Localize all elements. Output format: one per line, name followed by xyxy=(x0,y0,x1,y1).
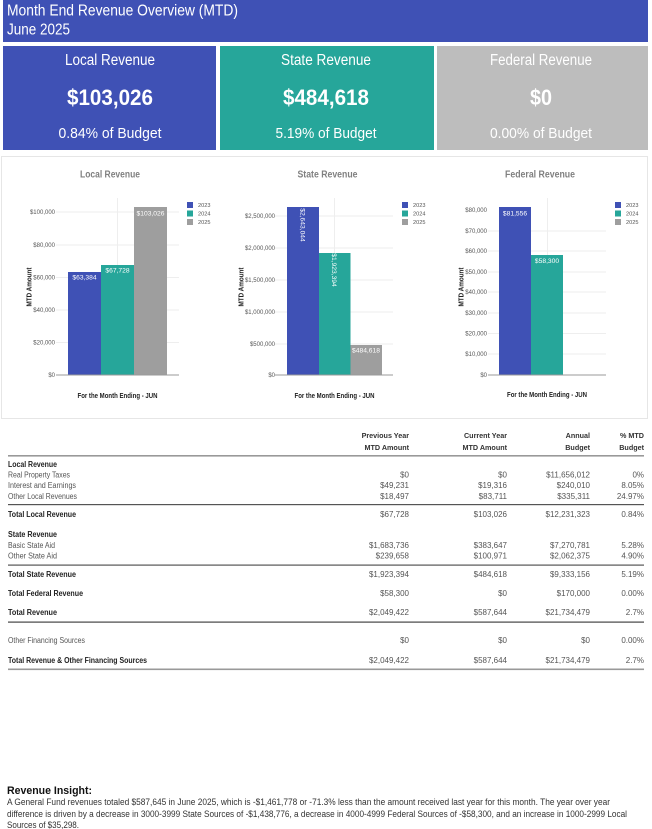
chart: state revenue: $0 xyxy=(268,373,276,379)
section: local revenue: $49,231 xyxy=(380,481,410,490)
row: total federal revenue xyxy=(8,589,644,598)
row: total revenue: $2,049,422 xyxy=(369,608,410,617)
chart: state revenue: 2024 xyxy=(413,212,425,218)
chart: federal revenue: $60,000 xyxy=(465,249,488,255)
chart: state revenue: MTD Amount xyxy=(236,267,246,306)
panel: charts container xyxy=(2,156,648,418)
chart: state revenue: $2,643,044 xyxy=(299,208,306,242)
row: other financing sources: Other Financing Sources xyxy=(8,636,85,645)
table header: MTD Amount xyxy=(463,443,508,452)
chart: federal revenue: $80,000 xyxy=(465,208,488,214)
section: local revenue: $0 xyxy=(498,470,508,480)
panel: state revenue KPI card: 5.19% of Budget xyxy=(276,125,377,142)
chart: federal revenue: $30,000 xyxy=(465,311,488,317)
chart: local revenue: 2023 xyxy=(198,203,210,209)
table header: % MTD xyxy=(620,431,644,440)
row: other financing sources: $0 xyxy=(498,636,508,645)
panel: federal revenue KPI card: Federal Revenue xyxy=(490,52,592,69)
chart: state revenue: $2,000,000 xyxy=(245,246,276,252)
section: state revenue: State Revenue xyxy=(8,530,57,539)
table header: Annual xyxy=(566,431,590,440)
chart: local revenue: Local Revenue xyxy=(80,170,140,180)
chart: federal revenue: $10,000 xyxy=(465,352,488,358)
chart: federal revenue: $50,000 xyxy=(465,270,488,276)
chart: federal revenue: $81,556 xyxy=(503,210,527,218)
panel: federal revenue KPI card: 0.00% of Budget xyxy=(490,125,593,142)
chart: federal revenue: For the Month Ending - JUN xyxy=(507,390,587,399)
row: total federal revenue: $0 xyxy=(498,589,508,598)
chart: state revenue: $2,500,000 xyxy=(245,214,276,220)
row: other financing sources: $0 xyxy=(581,636,591,645)
section: local revenue: $83,711 xyxy=(479,492,508,501)
section: local revenue: $67,728 xyxy=(380,510,410,519)
section: state revenue: $2,062,375 xyxy=(550,552,591,560)
row: total revenue and other financing sources: $21,734,479 xyxy=(546,656,591,665)
section: local revenue: Real Property Taxes xyxy=(8,470,70,480)
section: local revenue: $335,311 xyxy=(557,492,591,501)
section: state revenue: 5.28% xyxy=(621,541,644,550)
chart: local revenue: $100,000 xyxy=(30,210,56,216)
table header: Budget xyxy=(565,443,591,452)
table header: Current Year xyxy=(464,431,507,440)
chart: local revenue: $63,384 xyxy=(72,274,97,282)
panel: local revenue KPI card: 0.84% of Budget xyxy=(58,125,162,142)
section: local revenue: $19,316 xyxy=(478,481,508,490)
table header xyxy=(8,431,645,457)
chart: state revenue: $500,000 xyxy=(250,342,276,348)
chart: local revenue: $0 xyxy=(48,373,56,379)
chart: local revenue: MTD Amount xyxy=(24,267,34,306)
row: total revenue: $21,734,479 xyxy=(546,608,591,617)
chart: state revenue: $1,000,000 xyxy=(245,310,276,316)
section: local revenue: $11,656,012 xyxy=(546,470,591,480)
section: state revenue: $239,658 xyxy=(376,552,410,560)
row: total revenue and other financing sources: $2,049,422 xyxy=(369,656,410,665)
chart: federal revenue: $58,300 xyxy=(535,258,559,265)
chart: state revenue: $1,500,000 xyxy=(245,278,276,284)
chart: federal revenue: 2025 xyxy=(626,220,638,226)
row: total revenue: 2.7% xyxy=(626,608,644,617)
section: state revenue: Total State Revenue xyxy=(8,570,76,579)
row: total revenue and other financing sources: $587,644 xyxy=(474,656,508,665)
section: local revenue: $240,010 xyxy=(557,481,591,490)
panel: federal revenue KPI card: $0 xyxy=(530,85,552,110)
row: total revenue: Total Revenue xyxy=(8,608,57,617)
chart: federal revenue: Federal Revenue xyxy=(505,170,575,180)
row: other financing sources xyxy=(8,636,644,645)
row: total revenue xyxy=(8,608,644,623)
row: total federal revenue: 0.00% xyxy=(621,589,644,598)
section: local revenue: Other Local Revenues xyxy=(8,492,77,501)
section: state revenue: $383,647 xyxy=(474,541,508,550)
chart: state revenue: $1,923,394 xyxy=(330,253,337,287)
row: other financing sources: 0.00% xyxy=(621,636,644,645)
chart: state revenue: $484,618 xyxy=(352,348,380,354)
chart: local revenue: $80,000 xyxy=(33,243,56,249)
chart: local revenue: 2024 xyxy=(198,212,210,218)
chart: local revenue: $60,000 xyxy=(33,276,56,282)
table header: Budget xyxy=(619,443,645,452)
revenue insight text block: A General Fund revenues totaled $587,645 in June 2025, which is -$1,461,778 or -71.3% less than the amount received last year for this month. The year over year xyxy=(7,797,610,807)
section: state revenue: $9,333,156 xyxy=(550,570,591,579)
section: local revenue: $18,497 xyxy=(380,492,410,501)
row: total federal revenue: Total Federal Revenue xyxy=(8,589,83,598)
row: total federal revenue: $170,000 xyxy=(557,589,591,598)
chart: federal revenue: $0 xyxy=(480,373,488,379)
title banner: June 2025 xyxy=(7,22,70,38)
chart: state revenue: 2023 xyxy=(413,203,425,209)
table header: Previous Year xyxy=(362,431,409,440)
row: total revenue: $587,644 xyxy=(474,608,508,617)
section: local revenue: $103,026 xyxy=(474,510,508,519)
row: total revenue and other financing sources: Total Revenue & Other Financing Sources xyxy=(8,656,147,665)
chart: state revenue: State Revenue xyxy=(298,170,358,180)
panel: federal revenue KPI card xyxy=(437,46,648,150)
section: state revenue: 5.19% xyxy=(621,570,644,579)
section: local revenue: Total Local Revenue xyxy=(8,510,76,519)
chart: federal revenue: $70,000 xyxy=(465,229,488,235)
chart: state revenue: For the Month Ending - JUN xyxy=(294,391,374,400)
panel: state revenue KPI card: $484,618 xyxy=(283,85,369,110)
row: total federal revenue: $58,300 xyxy=(380,589,410,598)
section: state revenue: 4.90% xyxy=(621,552,644,560)
chart: federal revenue xyxy=(456,170,638,399)
title banner xyxy=(3,0,648,42)
revenue insight text block xyxy=(7,785,627,829)
section: local revenue: 8.05% xyxy=(621,481,644,490)
chart: state revenue xyxy=(236,170,425,400)
row: total revenue and other financing sources: 2.7% xyxy=(626,656,644,665)
chart: local revenue xyxy=(24,170,210,400)
chart: federal revenue: $40,000 xyxy=(465,290,488,296)
section: state revenue: $7,270,781 xyxy=(550,541,591,550)
section: state revenue: $484,618 xyxy=(474,570,508,579)
section: local revenue: Interest and Earnings xyxy=(8,481,76,490)
chart: federal revenue: 2024 xyxy=(626,212,638,218)
panel: local revenue KPI card: Local Revenue xyxy=(65,52,155,69)
chart: state revenue: 2025 xyxy=(413,220,425,226)
chart: local revenue: 2025 xyxy=(198,220,210,226)
table header: MTD Amount xyxy=(365,443,410,452)
section: local revenue: $0 xyxy=(400,470,410,480)
section: state revenue xyxy=(8,530,644,579)
section: local revenue: 24.97% xyxy=(617,492,644,501)
title banner: Month End Revenue Overview (MTD) xyxy=(7,2,238,20)
section: state revenue: Basic State Aid xyxy=(8,541,55,550)
section: state revenue: $1,683,736 xyxy=(369,541,410,550)
section: state revenue: $100,971 xyxy=(474,552,508,560)
revenue table xyxy=(8,431,645,670)
panel: state revenue KPI card: State Revenue xyxy=(281,52,371,69)
row: other financing sources: $0 xyxy=(400,636,410,645)
row: total revenue and other financing sources xyxy=(8,656,644,670)
chart: local revenue: $67,728 xyxy=(105,268,130,274)
section: state revenue: $1,923,394 xyxy=(369,570,410,579)
panel: local revenue KPI card: $103,026 xyxy=(67,85,153,110)
panel: state revenue KPI card xyxy=(220,46,434,150)
section: local revenue: 0.84% xyxy=(621,510,644,519)
chart: local revenue: $40,000 xyxy=(33,308,56,314)
section: local revenue: $12,231,323 xyxy=(546,510,591,519)
revenue insight text block: Revenue Insight: xyxy=(7,785,92,797)
section: local revenue xyxy=(8,460,644,519)
panel: local revenue KPI card xyxy=(3,46,216,150)
chart: local revenue: For the Month Ending - JUN xyxy=(78,391,158,400)
section: local revenue: Local Revenue xyxy=(8,460,57,469)
chart: federal revenue: $20,000 xyxy=(465,332,488,338)
chart: federal revenue: 2023 xyxy=(626,203,638,209)
chart: local revenue: $103,026 xyxy=(137,210,165,218)
chart: local revenue: $20,000 xyxy=(33,341,56,347)
section: local revenue: 0% xyxy=(632,470,644,480)
section: state revenue: Other State Aid xyxy=(8,552,57,560)
chart: federal revenue: MTD Amount xyxy=(456,267,466,306)
